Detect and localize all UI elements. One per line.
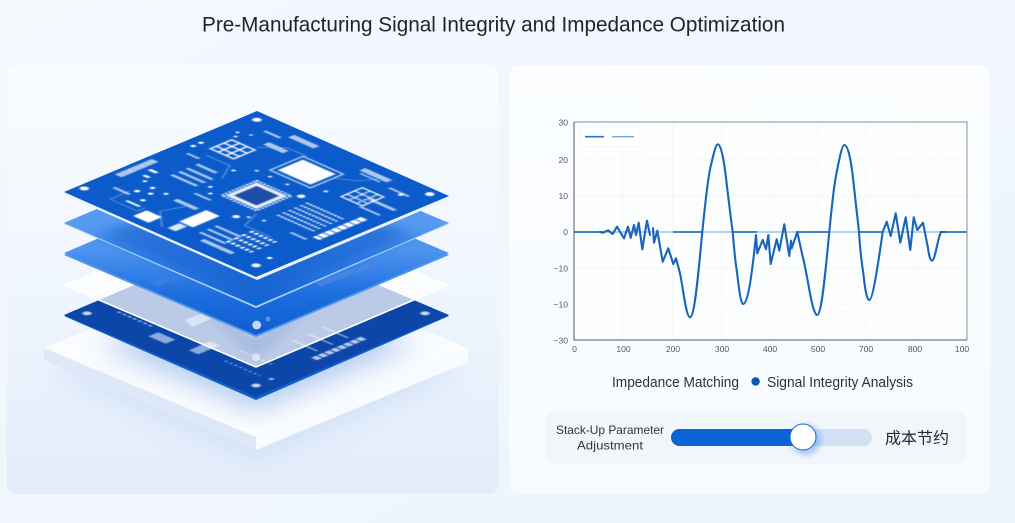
x axis labels: 100 — [955, 344, 969, 354]
y axis labels: −30 — [553, 336, 568, 346]
x axis labels: 400 — [763, 344, 777, 354]
y axis labels: −10 — [553, 264, 568, 274]
x axis labels: 800 — [908, 344, 922, 354]
x axis labels: 100 — [616, 344, 631, 354]
y axis labels: 20 — [558, 155, 568, 165]
baseline reference trace — [574, 231, 967, 233]
top PCB board — [64, 111, 449, 280]
slider track — [671, 424, 872, 455]
x axis labels: 500 — [811, 344, 825, 354]
signal waveform — [600, 144, 945, 317]
legend row — [612, 375, 913, 391]
panel: signal analysis — [509, 65, 990, 494]
legend row: Impedance Matching — [612, 375, 739, 391]
y axis labels: 30 — [558, 118, 568, 128]
y axis labels: 0 — [563, 227, 568, 237]
base plate — [44, 259, 468, 458]
traces — [101, 129, 395, 256]
panel: PCB layer stack — [7, 65, 499, 494]
bottom right pad row — [316, 218, 364, 239]
x axis labels: 300 — [715, 344, 729, 354]
slider label: Adjustment — [577, 438, 644, 452]
component grids — [112, 135, 384, 252]
layer 5: dark circuit layer — [64, 233, 449, 400]
layer 2: light blue layer — [64, 141, 449, 308]
x axis labels: 700 — [859, 344, 873, 354]
layer 3: blue layer — [64, 171, 449, 356]
x axis labels: 0 — [572, 344, 577, 354]
title: Pre-Manufacturing Signal Integrity and Impedance Optimization — [202, 14, 785, 36]
legend row: Signal Integrity Analysis — [767, 375, 913, 391]
y axis labels: −10 — [553, 300, 568, 310]
cost saving label: 成本节约 — [885, 430, 949, 448]
line field — [278, 203, 343, 231]
chart inset legend — [580, 127, 640, 146]
x axis labels: 200 — [666, 344, 680, 354]
slider label — [556, 423, 664, 452]
central chip — [222, 181, 291, 211]
y axis labels — [553, 118, 568, 346]
silk stripes — [87, 119, 428, 266]
layer 4: translucent layer — [64, 203, 449, 367]
stack-up parameter slider card — [545, 411, 967, 464]
y axis labels: 10 — [558, 191, 568, 201]
slider label: Stack-Up Parameter — [556, 423, 664, 437]
white rectangles — [270, 156, 343, 188]
mounting holes — [77, 114, 436, 269]
waveform chart — [553, 118, 969, 354]
x axis labels — [572, 344, 969, 354]
small dot clusters — [93, 123, 405, 258]
